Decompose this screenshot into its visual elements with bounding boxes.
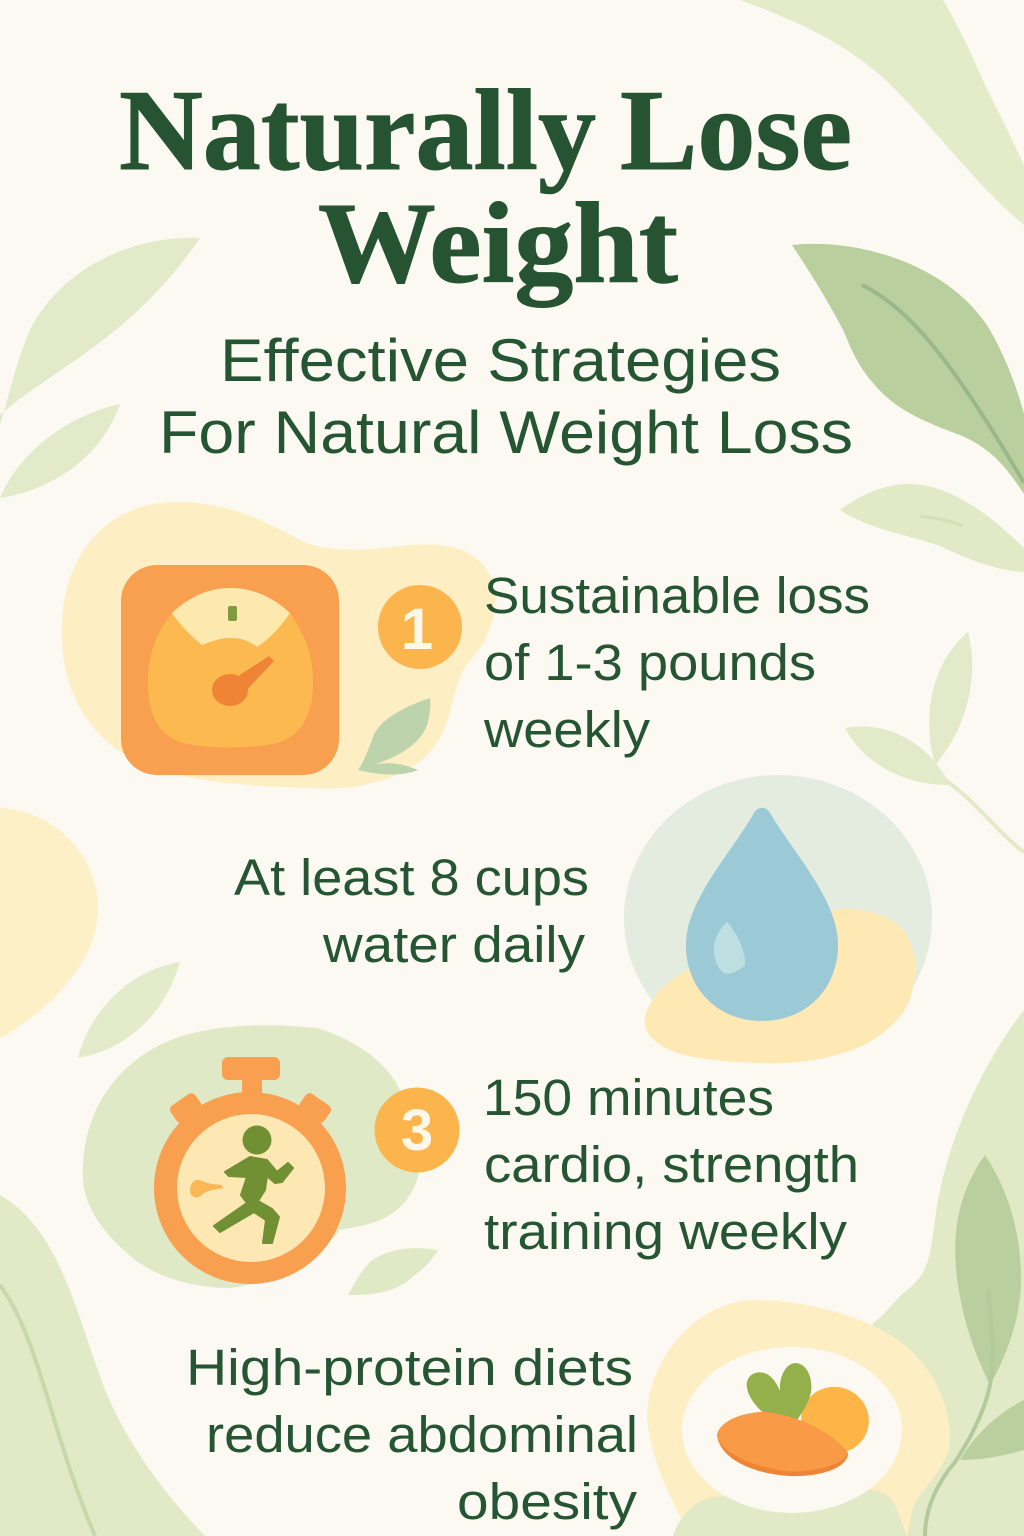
text: water	[234, 849, 589, 973]
blob: under plate green	[673, 1490, 907, 1536]
text: sustainable loss: of 1-3 pounds	[484, 634, 816, 691]
leaf: upper left	[0, 238, 200, 425]
title: Lose	[620, 67, 852, 195]
text: sustainable loss: Sustainable loss	[484, 567, 870, 624]
text: protein: High-protein diets	[186, 1339, 633, 1396]
leaf: right middle	[840, 484, 1024, 572]
text: water: At least 8 cups	[234, 849, 589, 906]
icon: stopwatch	[154, 1057, 346, 1284]
leaves: bottom right	[860, 1010, 1024, 1536]
icon: weight scale	[121, 565, 339, 775]
text: cardio: training weekly	[484, 1203, 848, 1260]
blob: stopwatch background	[83, 1025, 420, 1288]
subtitle: For Natural Weight Loss	[159, 399, 853, 466]
title: Naturally	[119, 67, 596, 195]
text: cardio: 150 minutes	[483, 1069, 774, 1126]
text: sustainable loss: weekly	[483, 701, 651, 758]
blob: water yellow	[645, 909, 915, 1063]
leaf: left	[0, 404, 120, 498]
blob: water background	[624, 775, 932, 1061]
text: protein: obesity	[457, 1473, 638, 1530]
icon: water drop	[686, 808, 838, 1021]
badge: 1: 1	[401, 597, 433, 662]
text: protein: reduce abdominal	[206, 1406, 638, 1463]
blob: left yellow	[0, 808, 98, 1038]
icon: plate with food	[682, 1347, 902, 1513]
sprig: right	[845, 632, 1024, 852]
icon: runner	[214, 1126, 293, 1243]
leaf: small left	[78, 962, 180, 1058]
leaf: top right	[740, 0, 1024, 225]
icon: small leaf	[358, 698, 430, 775]
text: cardio	[483, 1069, 859, 1260]
text: protein	[186, 1339, 638, 1530]
title: Weight	[318, 180, 678, 308]
leaf: upper right	[792, 244, 1024, 494]
text: sustainable loss	[483, 567, 870, 758]
icon: small leaf 3	[348, 1248, 438, 1295]
subtitle: Effective Strategies	[220, 327, 781, 394]
subtitle	[159, 327, 853, 466]
title	[119, 67, 852, 308]
blob: plate yellow	[647, 1300, 950, 1536]
badge: 3	[374, 1088, 460, 1172]
badge: 3: 3	[401, 1098, 433, 1163]
text: water: water daily	[322, 916, 586, 973]
leaves: bottom left	[0, 1195, 205, 1536]
text: cardio: cardio, strength	[484, 1136, 859, 1193]
blob: item 1 yellow	[62, 502, 495, 789]
badge: 1	[378, 585, 462, 669]
